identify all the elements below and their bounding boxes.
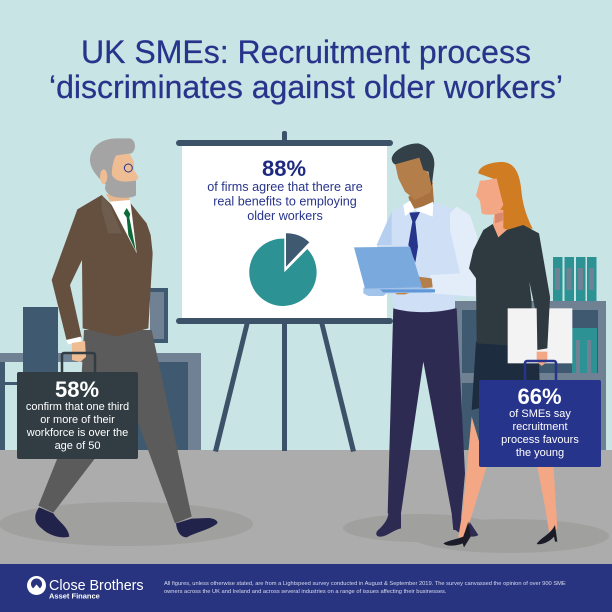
footnote bbox=[164, 581, 566, 595]
briefcase: 58%: or more of their bbox=[40, 414, 115, 426]
floor bbox=[0, 450, 612, 564]
man shoes bbox=[35, 507, 217, 537]
board statistic: 88%: of firms agree that there are bbox=[207, 180, 363, 194]
board statistic: 88%: real benefits to employing bbox=[213, 194, 357, 208]
woman heels bbox=[443, 522, 557, 547]
title bbox=[49, 34, 563, 105]
woman briefcase handle bbox=[525, 361, 556, 383]
second man hand bbox=[418, 277, 433, 288]
man tie bbox=[124, 208, 136, 252]
woman skirt bbox=[472, 342, 540, 410]
second man shoes bbox=[376, 513, 478, 537]
board statistic: 88%: older workers bbox=[247, 209, 323, 223]
board statistic: 88% bbox=[207, 156, 363, 223]
board statistic: 88%: 88% bbox=[262, 156, 306, 181]
logo: Close Brothers bbox=[27, 576, 144, 600]
woman top bbox=[469, 224, 550, 350]
briefcase: 58%: age of 50 bbox=[55, 440, 100, 452]
briefcase: 66%: of SMEs say bbox=[509, 408, 571, 420]
logo: Close Brothers: Asset Finance bbox=[49, 592, 100, 600]
title: UK SMEs: Recruitment process bbox=[81, 34, 531, 70]
man shirt bbox=[110, 200, 137, 253]
second man tie bbox=[408, 212, 420, 263]
briefcase: 66% bbox=[479, 380, 601, 467]
man jacket bbox=[52, 195, 153, 341]
briefcase: 66%: recruitment bbox=[512, 421, 568, 433]
woman paper folder bbox=[508, 308, 572, 363]
woman sleeve bbox=[537, 297, 550, 350]
second man neck and face bbox=[408, 185, 434, 209]
title: ‘discriminates against older workers’ bbox=[49, 69, 563, 105]
man shirt cuff bbox=[66, 337, 82, 344]
second man shirt bbox=[377, 202, 477, 312]
man with briefcase bbox=[35, 138, 217, 537]
man hair bbox=[90, 138, 135, 186]
footnote: owners across the UK and Ireland and across several industries on a range of issues affecting their businesses. bbox=[164, 589, 447, 595]
logo: Close Brothers: Close Brothers bbox=[49, 578, 144, 594]
man glasses bbox=[124, 164, 132, 172]
woman face bbox=[476, 178, 503, 215]
man trousers bbox=[38, 330, 192, 523]
second man hair bbox=[392, 143, 434, 187]
briefcase: 58%: confirm that one third bbox=[26, 401, 129, 413]
laptop bbox=[363, 288, 435, 296]
briefcase: 66%: the young bbox=[516, 447, 564, 459]
man beard bbox=[105, 175, 136, 198]
woman bbox=[443, 162, 572, 547]
briefcase: 58%: workforce is over the bbox=[26, 427, 128, 439]
man neck and face bbox=[106, 194, 132, 207]
pie chart bbox=[249, 233, 317, 306]
easel bbox=[176, 131, 393, 452]
woman hand bbox=[537, 352, 547, 366]
briefcase: 66%: process favours bbox=[501, 434, 579, 446]
floor shadows bbox=[0, 502, 609, 553]
second man trousers bbox=[388, 307, 465, 530]
left desk and monitor bbox=[0, 288, 201, 450]
second man collar bbox=[403, 201, 433, 217]
briefcase: 58%: 58% bbox=[55, 377, 99, 402]
right shelf with folders bbox=[455, 257, 606, 450]
briefcase handle bbox=[62, 353, 95, 375]
man with laptop bbox=[354, 143, 478, 537]
woman hair back bbox=[478, 162, 533, 232]
woman neck bbox=[493, 210, 508, 238]
footnote: All figures, unless otherwise stated, are from a Lightspeed survey conducted in August & September 2019. The survey canvassed the opinion of over 900 SME bbox=[164, 581, 566, 587]
footer band bbox=[0, 564, 612, 612]
briefcase: 66%: 66% bbox=[517, 384, 562, 409]
man hand bbox=[72, 341, 86, 362]
briefcase: 58% bbox=[17, 372, 138, 459]
second man sleeve bbox=[430, 207, 477, 297]
woman legs bbox=[458, 417, 557, 540]
